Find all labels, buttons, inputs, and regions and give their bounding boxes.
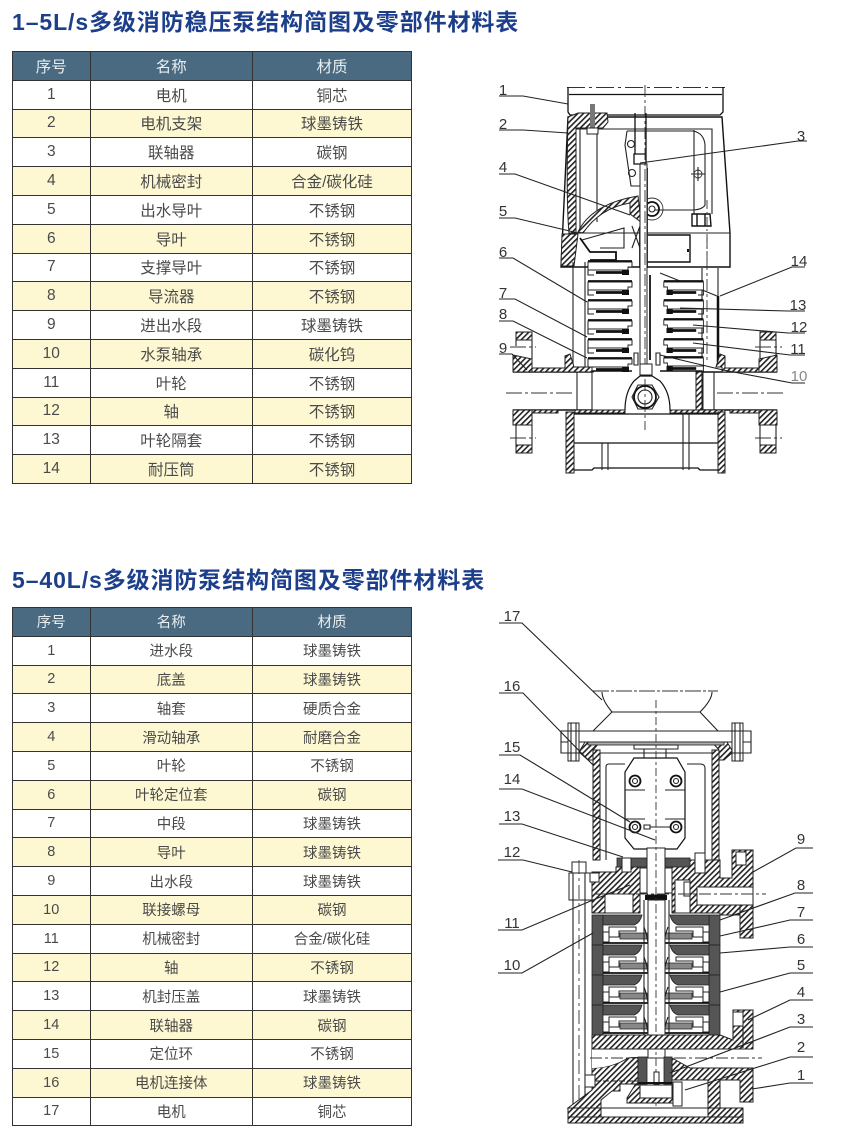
table: parts list 1-5L/s: 名称 <box>156 59 187 76</box>
coupling <box>625 758 685 849</box>
table: parts list 1-5L/s: 序号 <box>36 59 67 76</box>
motor cone <box>593 691 718 731</box>
callouts 1-5L/s: 8 <box>499 306 507 323</box>
callouts 1-5L/s: 12 <box>791 319 807 336</box>
callouts 1-5L/s: 2 <box>499 116 507 133</box>
callouts 1-5L/s: 10 <box>791 368 807 385</box>
table: parts list 1-5L/s: 14 <box>43 460 60 477</box>
table: parts list 5-40L/s: 机械密封 <box>142 932 200 948</box>
table: parts list 5-40L/s: 12 <box>43 959 59 975</box>
table: parts list 1-5L/s: 球墨铸铁 <box>301 318 363 335</box>
table: parts list 1-5L/s: 10 <box>43 345 60 362</box>
table: parts list 5-40L/s: 联轴器 <box>150 1019 193 1035</box>
table: parts list 5-40L/s: 滑动轴承 <box>142 731 200 747</box>
table: parts list 1-5L/s: 叶轮隔套 <box>140 433 202 450</box>
table: parts list 5-40L/s: 6 <box>47 787 55 803</box>
table: parts list 5-40L/s: 8 <box>47 844 55 860</box>
table: parts list 1-5L/s: 电机支架 <box>140 116 202 133</box>
motor <box>567 87 725 115</box>
stages <box>592 915 720 1035</box>
table: parts list 5-40L/s: 碳钢 <box>318 903 346 919</box>
table: parts list 1-5L/s: 导流器 <box>148 289 194 306</box>
table: parts list 1-5L/s: 球墨铸铁 <box>301 116 363 133</box>
table: parts list 5-40L/s: 电机 <box>157 1105 186 1121</box>
impeller stages left <box>588 261 632 372</box>
table: parts list 1-5L/s: 机械密封 <box>140 174 202 191</box>
table: parts list 5-40L/s: 15 <box>43 1046 59 1062</box>
table: parts list 1-5L/s: 不锈钢 <box>309 433 355 450</box>
motor connector housing <box>593 750 719 860</box>
table: parts list 5-40L/s: 13 <box>43 988 59 1004</box>
table: parts list 5-40L/s: 出水段 <box>150 875 193 891</box>
callouts 5-40L/s right: 1 <box>797 1067 805 1084</box>
table: parts list 5-40L/s: 轴 <box>164 961 178 977</box>
table: parts list 5-40L/s: 底盖 <box>157 673 186 689</box>
table: parts list 1-5L/s: 2 <box>47 114 56 131</box>
table: parts list 5-40L/s: 不锈钢 <box>310 759 354 775</box>
base and bottom cover <box>568 1082 743 1123</box>
table: parts list 1-5L/s: 11 <box>43 374 59 391</box>
callouts 1-5L/s: 13 <box>790 297 806 314</box>
table: parts list 5-40L/s: 2 <box>47 671 55 687</box>
callouts 5-40L/s right: 8 <box>797 877 805 894</box>
table: parts list 5-40L/s: 球墨铸铁 <box>303 1076 361 1092</box>
table: parts list 5-40L/s: 球墨铸铁 <box>303 817 361 833</box>
table: parts list 1-5L/s: 7 <box>47 258 56 275</box>
table: parts list 1-5L/s: 联轴器 <box>148 145 194 162</box>
table: parts list 5-40L/s <box>12 607 412 1126</box>
table: parts list 1-5L/s: 不锈钢 <box>309 404 355 421</box>
table: parts list 1-5L/s <box>12 51 412 484</box>
pipe body with flanges <box>506 332 785 453</box>
title: 1-5L/s pump: 1–5L/s多级消防稳压泵结构简图及零部件材料表 <box>12 9 519 35</box>
table: parts list 1-5L/s: 不锈钢 <box>309 203 355 220</box>
callouts 5-40L/s right: 6 <box>797 931 805 948</box>
table: parts list 1-5L/s: 4 <box>47 172 56 189</box>
table: parts list 5-40L/s: 铜芯 <box>318 1105 346 1121</box>
table: parts list 1-5L/s: 6 <box>47 230 56 247</box>
table: parts list 5-40L/s: 不锈钢 <box>310 961 354 977</box>
table: parts list 5-40L/s: 5 <box>47 758 55 774</box>
callouts 1-5L/s: 3 <box>797 128 805 145</box>
table: parts list 1-5L/s: 水泵轴承 <box>140 347 202 364</box>
callouts 5-40L/s left: 17 <box>504 608 520 625</box>
table: parts list 1-5L/s: 不锈钢 <box>309 376 355 393</box>
table: parts list 5-40L/s: 耐磨合金 <box>303 731 361 747</box>
table: parts list 1-5L/s: 电机 <box>156 88 187 105</box>
table: parts list 5-40L/s: 16 <box>43 1075 59 1091</box>
callouts 5-40L/s right: 3 <box>797 1011 805 1028</box>
callouts 5-40L/s right <box>670 831 813 1090</box>
coupling <box>625 113 705 220</box>
table: parts list 1-5L/s: 不锈钢 <box>309 462 355 479</box>
callouts 1-5L/s <box>499 82 807 385</box>
callouts 5-40L/s right: 4 <box>797 984 805 1001</box>
table: parts list 5-40L/s: 进水段 <box>150 644 193 660</box>
table: parts list 5-40L/s: 导叶 <box>157 846 186 862</box>
callouts 1-5L/s: 9 <box>499 340 507 357</box>
tie rod <box>572 860 586 1110</box>
callouts 1-5L/s: 6 <box>499 244 507 261</box>
table: parts list 5-40L/s: 不锈钢 <box>310 1047 354 1063</box>
table: parts list 5-40L/s: 14 <box>43 1017 59 1033</box>
table: parts list 5-40L/s: 电机连接体 <box>135 1076 208 1092</box>
table: parts list 5-40L/s: 叶轮定位套 <box>135 788 208 804</box>
callouts 1-5L/s: 11 <box>790 341 806 358</box>
callouts 1-5L/s: 5 <box>499 203 507 220</box>
table: parts list 1-5L/s: 不锈钢 <box>309 289 355 306</box>
table: parts list 5-40L/s: 材质 <box>318 615 346 631</box>
table: parts list 5-40L/s: 叶轮 <box>157 759 186 775</box>
table: parts list 1-5L/s: 支撑导叶 <box>140 260 202 277</box>
callouts 1-5L/s: 4 <box>499 159 507 176</box>
table: parts list 5-40L/s: 7 <box>47 815 55 831</box>
table: parts list 1-5L/s: 1 <box>47 86 56 103</box>
top flange and bolts <box>561 723 751 761</box>
table: parts list 1-5L/s: 轴 <box>163 404 179 421</box>
diagram: 5-40L/s pump cross-section <box>498 608 813 1124</box>
callouts 5-40L/s left: 11 <box>504 915 520 932</box>
table: parts list 5-40L/s: 轴套 <box>157 702 186 718</box>
table: parts list 5-40L/s: 序号 <box>37 615 66 631</box>
table: parts list 1-5L/s: 8 <box>47 287 56 304</box>
support stand <box>566 412 725 473</box>
shaft and barrel <box>573 85 718 430</box>
impeller stages right <box>664 281 703 371</box>
callouts 5-40L/s left: 10 <box>504 957 520 974</box>
table: parts list 5-40L/s: 11 <box>44 931 59 947</box>
table: parts list 5-40L/s: 1 <box>47 643 55 659</box>
callouts 5-40L/s left: 15 <box>504 739 520 756</box>
callouts 5-40L/s right: 9 <box>797 831 805 848</box>
table: parts list 1-5L/s: 叶轮 <box>156 376 187 393</box>
table: parts list 1-5L/s: 3 <box>47 143 56 160</box>
outlet section <box>569 848 766 938</box>
title: 5-40L/s pump: 5–40L/s多级消防泵结构简图及零部件材料表 <box>12 567 485 593</box>
table: parts list 1-5L/s: 12 <box>43 402 60 419</box>
table: parts list 5-40L/s: 定位环 <box>150 1047 193 1063</box>
table: parts list 5-40L/s: 3 <box>47 700 55 716</box>
callouts 5-40L/s left <box>498 608 655 974</box>
table: parts list 5-40L/s: 9 <box>47 873 55 889</box>
inlet section <box>568 1010 762 1117</box>
table: parts list 1-5L/s: 不锈钢 <box>309 232 355 249</box>
table: parts list 1-5L/s: 耐压筒 <box>148 462 194 479</box>
table: parts list 1-5L/s: 铜芯 <box>316 88 348 105</box>
table: parts list 5-40L/s: 10 <box>43 902 59 918</box>
table: parts list 5-40L/s: 17 <box>43 1103 59 1119</box>
table: parts list 1-5L/s: 13 <box>43 431 60 448</box>
callouts 5-40L/s left: 14 <box>504 771 520 788</box>
callouts 5-40L/s right: 5 <box>797 957 805 974</box>
callouts 5-40L/s left: 12 <box>504 844 520 861</box>
table: parts list 1-5L/s: 进出水段 <box>140 318 202 335</box>
table: parts list 5-40L/s: 联接螺母 <box>142 903 200 919</box>
table: parts list 5-40L/s: 碳钢 <box>318 788 346 804</box>
table: parts list 5-40L/s: 硬质合金 <box>303 702 361 718</box>
table: parts list 5-40L/s: 名称 <box>157 615 186 631</box>
table: parts list 1-5L/s: 9 <box>47 316 56 333</box>
callouts 5-40L/s left: 16 <box>504 678 520 695</box>
shaft <box>644 700 669 1124</box>
motor bracket <box>561 104 730 267</box>
table: parts list 1-5L/s: 碳化钨 <box>309 347 355 364</box>
table: parts list 1-5L/s: 合金/碳化硅 <box>291 174 373 191</box>
table: parts list 5-40L/s: 机封压盖 <box>142 990 200 1006</box>
callouts 5-40L/s right: 2 <box>797 1039 805 1056</box>
mechanical seal and outlet guide vane <box>578 168 690 268</box>
table: parts list 5-40L/s: 球墨铸铁 <box>303 990 361 1006</box>
table: parts list 5-40L/s: 球墨铸铁 <box>303 644 361 660</box>
table: parts list 5-40L/s: 碳钢 <box>318 1019 346 1035</box>
table: parts list 5-40L/s: 球墨铸铁 <box>303 673 361 689</box>
table: parts list 5-40L/s: 中段 <box>157 817 186 833</box>
diagram: 1-5L/s pump cross-section <box>499 82 807 473</box>
callouts 5-40L/s right: 7 <box>797 904 805 921</box>
table: parts list 1-5L/s: 导叶 <box>156 232 187 249</box>
table: parts list 1-5L/s: 不锈钢 <box>309 260 355 277</box>
table: parts list 5-40L/s: 球墨铸铁 <box>303 846 361 862</box>
table: parts list 1-5L/s: 出水导叶 <box>140 203 202 220</box>
table: parts list 1-5L/s: 碳钢 <box>316 145 348 162</box>
table: parts list 1-5L/s: 5 <box>47 201 56 218</box>
callouts 1-5L/s: 7 <box>499 285 507 302</box>
table: parts list 5-40L/s: 4 <box>47 729 55 745</box>
callouts 5-40L/s left: 13 <box>504 808 520 825</box>
table: parts list 5-40L/s: 合金/碳化硅 <box>294 932 370 948</box>
callouts 1-5L/s: 1 <box>499 82 507 99</box>
table: parts list 1-5L/s: 材质 <box>316 59 348 76</box>
table: parts list 5-40L/s: 球墨铸铁 <box>303 875 361 891</box>
callouts 1-5L/s: 14 <box>791 253 807 270</box>
shaft bearing sleeve <box>588 275 702 375</box>
